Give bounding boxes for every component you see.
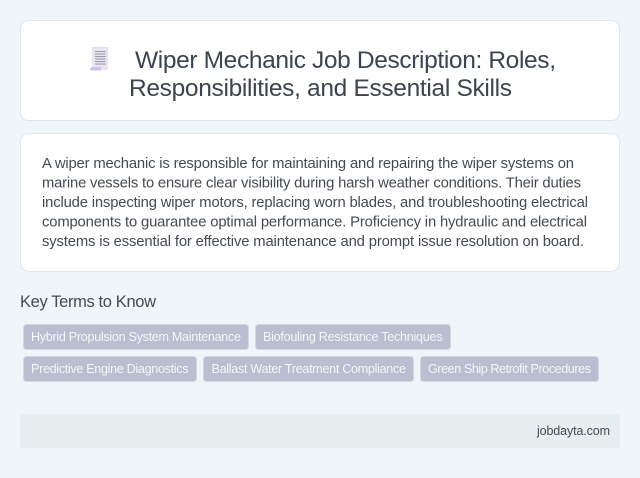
tag list — [24, 324, 598, 382]
tag: predictive diagnostics — [24, 356, 196, 382]
tag: green ship retrofit: Green Ship Retrofit Procedures — [428, 362, 591, 376]
tag: biofouling: Biofouling Resistance Techniques — [263, 330, 442, 344]
heading: key terms: Key Terms to Know — [20, 293, 156, 311]
panel: title card — [20, 20, 620, 120]
text block: description: systems is essential for effective maintenance and prompt issue resolution on board. — [42, 234, 584, 250]
panel: description card — [20, 134, 620, 272]
icon: document scroll — [90, 48, 108, 70]
tag: hybrid propulsion: Hybrid Propulsion System Maintenance — [31, 330, 241, 344]
title: Wiper Mechanic Job Description: Roles, — [135, 47, 556, 74]
footer source: jobdayta.com — [536, 424, 610, 438]
text block: description: A wiper mechanic is responsible for maintaining and repairing the wiper systems on — [42, 156, 574, 172]
text block: description: marine vessels to ensure clear visibility during harsh weather conditions. Their duties — [42, 176, 581, 192]
tag: predictive diagnostics: Predictive Engine Diagnostics — [31, 362, 188, 376]
tag: biofouling — [256, 324, 450, 350]
title — [129, 47, 556, 102]
text block: description: components to guarantee optimal performance. Proficiency in hydraulic and electrical — [42, 214, 587, 230]
text block: description: include inspecting wiper motors, replacing worn blades, and troubleshooting electrical — [42, 195, 588, 211]
footer — [20, 414, 620, 448]
title: Responsibilities, and Essential Skills — [129, 75, 512, 102]
tag: hybrid propulsion — [24, 324, 248, 350]
text block: description — [42, 156, 588, 250]
tag: green ship retrofit — [420, 356, 598, 382]
tag: ballast water — [204, 356, 414, 382]
tag: ballast water: Ballast Water Treatment Compliance — [212, 362, 406, 376]
